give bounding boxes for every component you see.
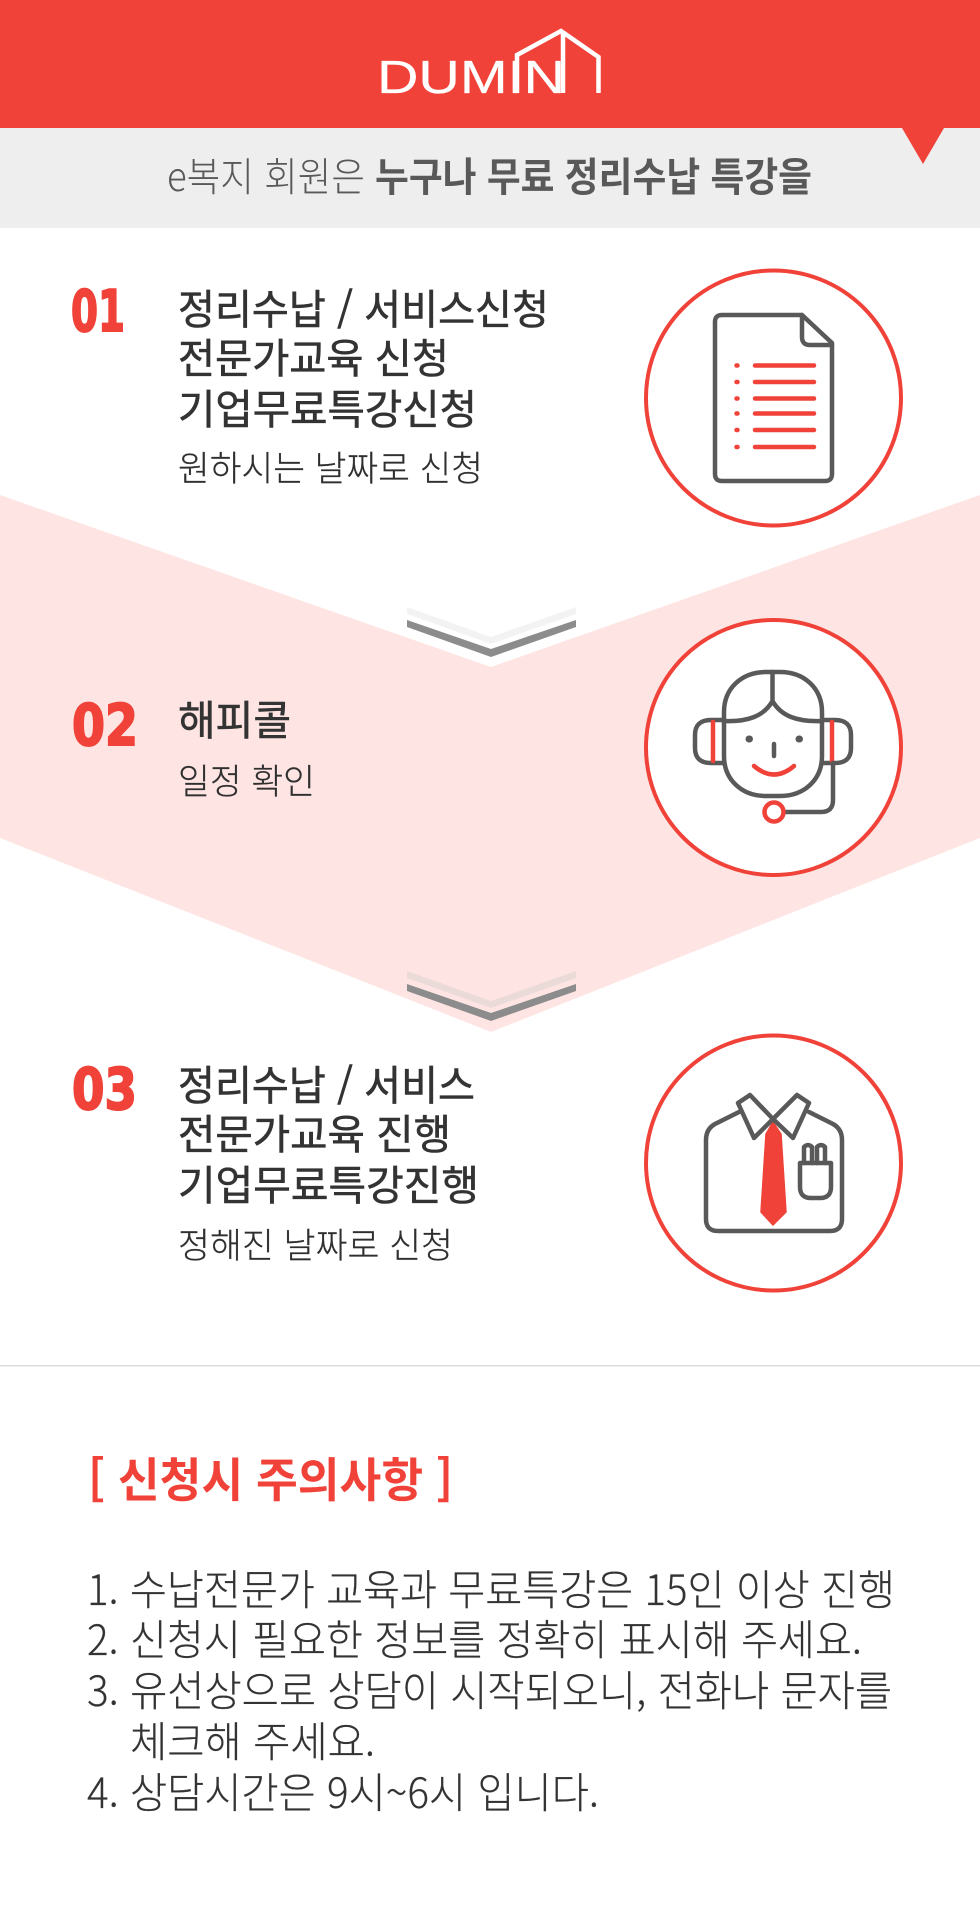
step 2 <box>72 687 315 805</box>
divider <box>0 1365 980 1366</box>
pink chevron band <box>0 495 980 1032</box>
step 1 title: 기업무료특강신청 <box>178 376 477 436</box>
step 3 title: 정리수납 / 서비스 <box>178 1052 475 1112</box>
icon: shirt and tie <box>646 1036 901 1290</box>
notes heading: [ 신청시 주의사항 ] <box>88 1442 453 1511</box>
notes list: 4. 상담시간은 9시~6시 입니다. <box>87 1760 599 1821</box>
step 3 <box>72 1052 479 1269</box>
logo: DUMIN <box>377 31 598 103</box>
header bar with logo <box>0 0 980 128</box>
step 3 description: 정해진 날짜로 신청 <box>178 1218 453 1269</box>
step 1 title: 정리수납 / 서비스신청 <box>178 276 549 336</box>
step 1 description: 원하시는 날짜로 신청 <box>178 441 483 492</box>
step number 02: 02 <box>72 693 138 759</box>
step 1 title: 전문가교육 신청 <box>178 325 449 385</box>
notes list: 2. 신청시 필요한 정보를 정확히 표시해 주세요. <box>87 1607 862 1668</box>
step 3 title: 기업무료특강진행 <box>178 1152 479 1212</box>
subtitle text <box>167 145 812 203</box>
notes list <box>87 1557 895 1821</box>
step 2 description: 일정 확인 <box>178 754 315 805</box>
header pointer triangle <box>902 128 944 164</box>
step 1 title <box>178 276 549 436</box>
notes list: 3. 유선상으로 상담이 시작되오니, 전화나 문자를 <box>87 1658 892 1719</box>
icon: document <box>646 270 901 526</box>
step 2 title: 해피콜 <box>178 687 291 747</box>
subtitle band <box>0 128 980 228</box>
step 3 title <box>178 1052 479 1212</box>
notes list: 1. 수납전문가 교육과 무료특강은 15인 이상 진행 <box>87 1557 895 1618</box>
subtitle text: 누구나 무료 정리수납 특강을 <box>375 145 812 203</box>
icon: headset agent <box>646 620 901 875</box>
step 1 <box>71 276 549 492</box>
step 3 title: 전문가교육 진행 <box>178 1101 451 1161</box>
chevron arrow 1 <box>407 607 576 657</box>
chevron arrow 2 <box>407 971 576 1021</box>
subtitle text: e복지 회원은 <box>167 145 365 203</box>
step number 03: 03 <box>72 1057 137 1123</box>
step number 01: 01 <box>71 279 125 345</box>
notes list: 체크해 주세요. <box>130 1709 375 1770</box>
logo: DUMIN: DUMIN <box>377 51 565 103</box>
